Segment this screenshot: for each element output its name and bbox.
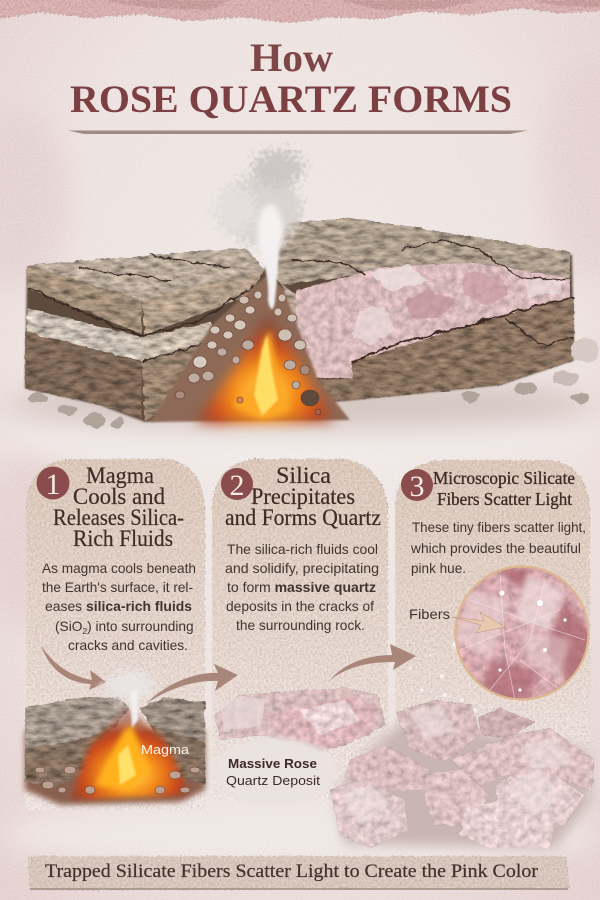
right block xyxy=(270,218,574,402)
step 2 heading xyxy=(225,463,381,530)
step 3 heading xyxy=(433,468,575,509)
step 3 body text xyxy=(410,520,586,576)
step 2 heading: Silica xyxy=(276,463,331,488)
small steam xyxy=(106,671,154,699)
step 1 body text: the Earth's surface, it rel- xyxy=(42,580,193,595)
step 1 number: 1 xyxy=(46,468,60,501)
rock rubble in fissure xyxy=(175,291,321,415)
illustration: main rock cross-section xyxy=(5,150,599,429)
step 1 heading: Rich Fluids xyxy=(73,526,173,551)
step 1 body text: ) into surrounding xyxy=(87,619,194,634)
panel 3 background xyxy=(395,460,590,800)
step 3 number xyxy=(401,469,433,503)
step 2 heading: Precipitates xyxy=(251,484,355,509)
step 1 body text: eases silica-rich fluids xyxy=(45,599,192,614)
step 2 body text xyxy=(225,542,379,633)
fibers label and arrow xyxy=(409,607,505,633)
pink quartz vein patches xyxy=(352,265,565,345)
fibers label and arrow: Fibers xyxy=(409,607,450,622)
arrow: into step 1 magma xyxy=(41,645,106,690)
crystal facets xyxy=(340,705,575,825)
step 2 number xyxy=(221,468,253,502)
step 1 body text: (SiO xyxy=(55,619,82,634)
step 1 body text: cracks and cavities. xyxy=(68,638,188,653)
arrow: step 2 to step 3 xyxy=(330,644,416,680)
step 2 number: 2 xyxy=(230,469,244,502)
step 1 heading: Releases Silica- xyxy=(53,505,184,530)
step 3 body text: which provides the beautiful xyxy=(410,541,581,556)
small rock underlay xyxy=(25,730,205,805)
panel 2 background xyxy=(212,459,388,800)
step 3 body text: These tiny fibers scatter light, xyxy=(412,520,586,535)
step 2 body text: and solidify, precipitating xyxy=(225,561,379,576)
magma label: Magma xyxy=(141,742,190,757)
arrow: step 1 to step 2 xyxy=(147,664,238,703)
sparkle trail xyxy=(408,642,476,712)
magma fissure xyxy=(195,310,335,424)
scattered ground pebbles xyxy=(29,338,599,428)
bottom banner xyxy=(28,856,569,890)
small magma vent xyxy=(70,708,190,800)
deposit label: Quartz Deposit xyxy=(226,773,320,788)
panel: step 3 xyxy=(395,460,595,800)
panel: step 2 xyxy=(212,459,388,800)
small rock slabs xyxy=(25,697,205,790)
panel 1 background xyxy=(26,459,205,810)
step 1 heading: Cools and xyxy=(73,484,165,509)
step 2 body text: to form massive quartz xyxy=(227,580,376,595)
ground shadow xyxy=(5,381,595,429)
deposit label xyxy=(213,738,337,806)
magnified lens of fibers xyxy=(455,566,595,705)
step 2 body text: deposits in the cracks of xyxy=(226,599,374,614)
step 3 number: 3 xyxy=(410,470,424,503)
panel: step 1 xyxy=(26,459,205,810)
step 1 heading: Magma xyxy=(86,463,154,488)
illustration: massive rose quartz deposit xyxy=(213,688,385,806)
rose quartz seam xyxy=(296,262,570,378)
cracks xyxy=(27,240,574,362)
step 1 number xyxy=(36,466,70,501)
fissure fill with dim rubble tone xyxy=(150,276,350,422)
small rubble xyxy=(35,766,200,794)
step 2 heading: and Forms Quartz xyxy=(225,505,381,530)
step 1 heading xyxy=(53,463,184,551)
step 1 body text: As magma cools beneath xyxy=(42,561,196,576)
step 2 body text: the surrounding rock. xyxy=(236,618,365,633)
title underline xyxy=(68,130,528,134)
crystal shadow bed xyxy=(335,720,590,848)
title line: Rose Quartz Forms: ROSE QUARTZ FORMS xyxy=(70,78,512,121)
left block xyxy=(25,248,264,421)
title xyxy=(68,35,528,134)
deposit label: Massive Rose xyxy=(228,756,317,771)
step 3 heading: Microscopic Silicate xyxy=(433,468,575,488)
step 1 body text: 2 xyxy=(82,626,87,636)
illustration: small magma rock xyxy=(25,671,205,805)
illustration: rose quartz crystal chunks xyxy=(330,700,594,848)
step 1 body text xyxy=(42,561,196,653)
deposit rubble and crystal xyxy=(215,688,385,752)
step 3 heading: Fibers Scatter Light xyxy=(437,489,572,509)
rock underlay xyxy=(25,225,574,422)
title line: How: How xyxy=(250,35,333,80)
steam plume xyxy=(213,150,304,309)
banner text: Trapped Silicate Fibers Scatter Light to Create the Pink Color xyxy=(45,861,539,882)
step 3 body text: pink hue. xyxy=(411,561,466,576)
step 2 body text: The silica-rich fluids cool xyxy=(227,542,378,557)
top decorative rose crystal strip xyxy=(0,0,600,23)
